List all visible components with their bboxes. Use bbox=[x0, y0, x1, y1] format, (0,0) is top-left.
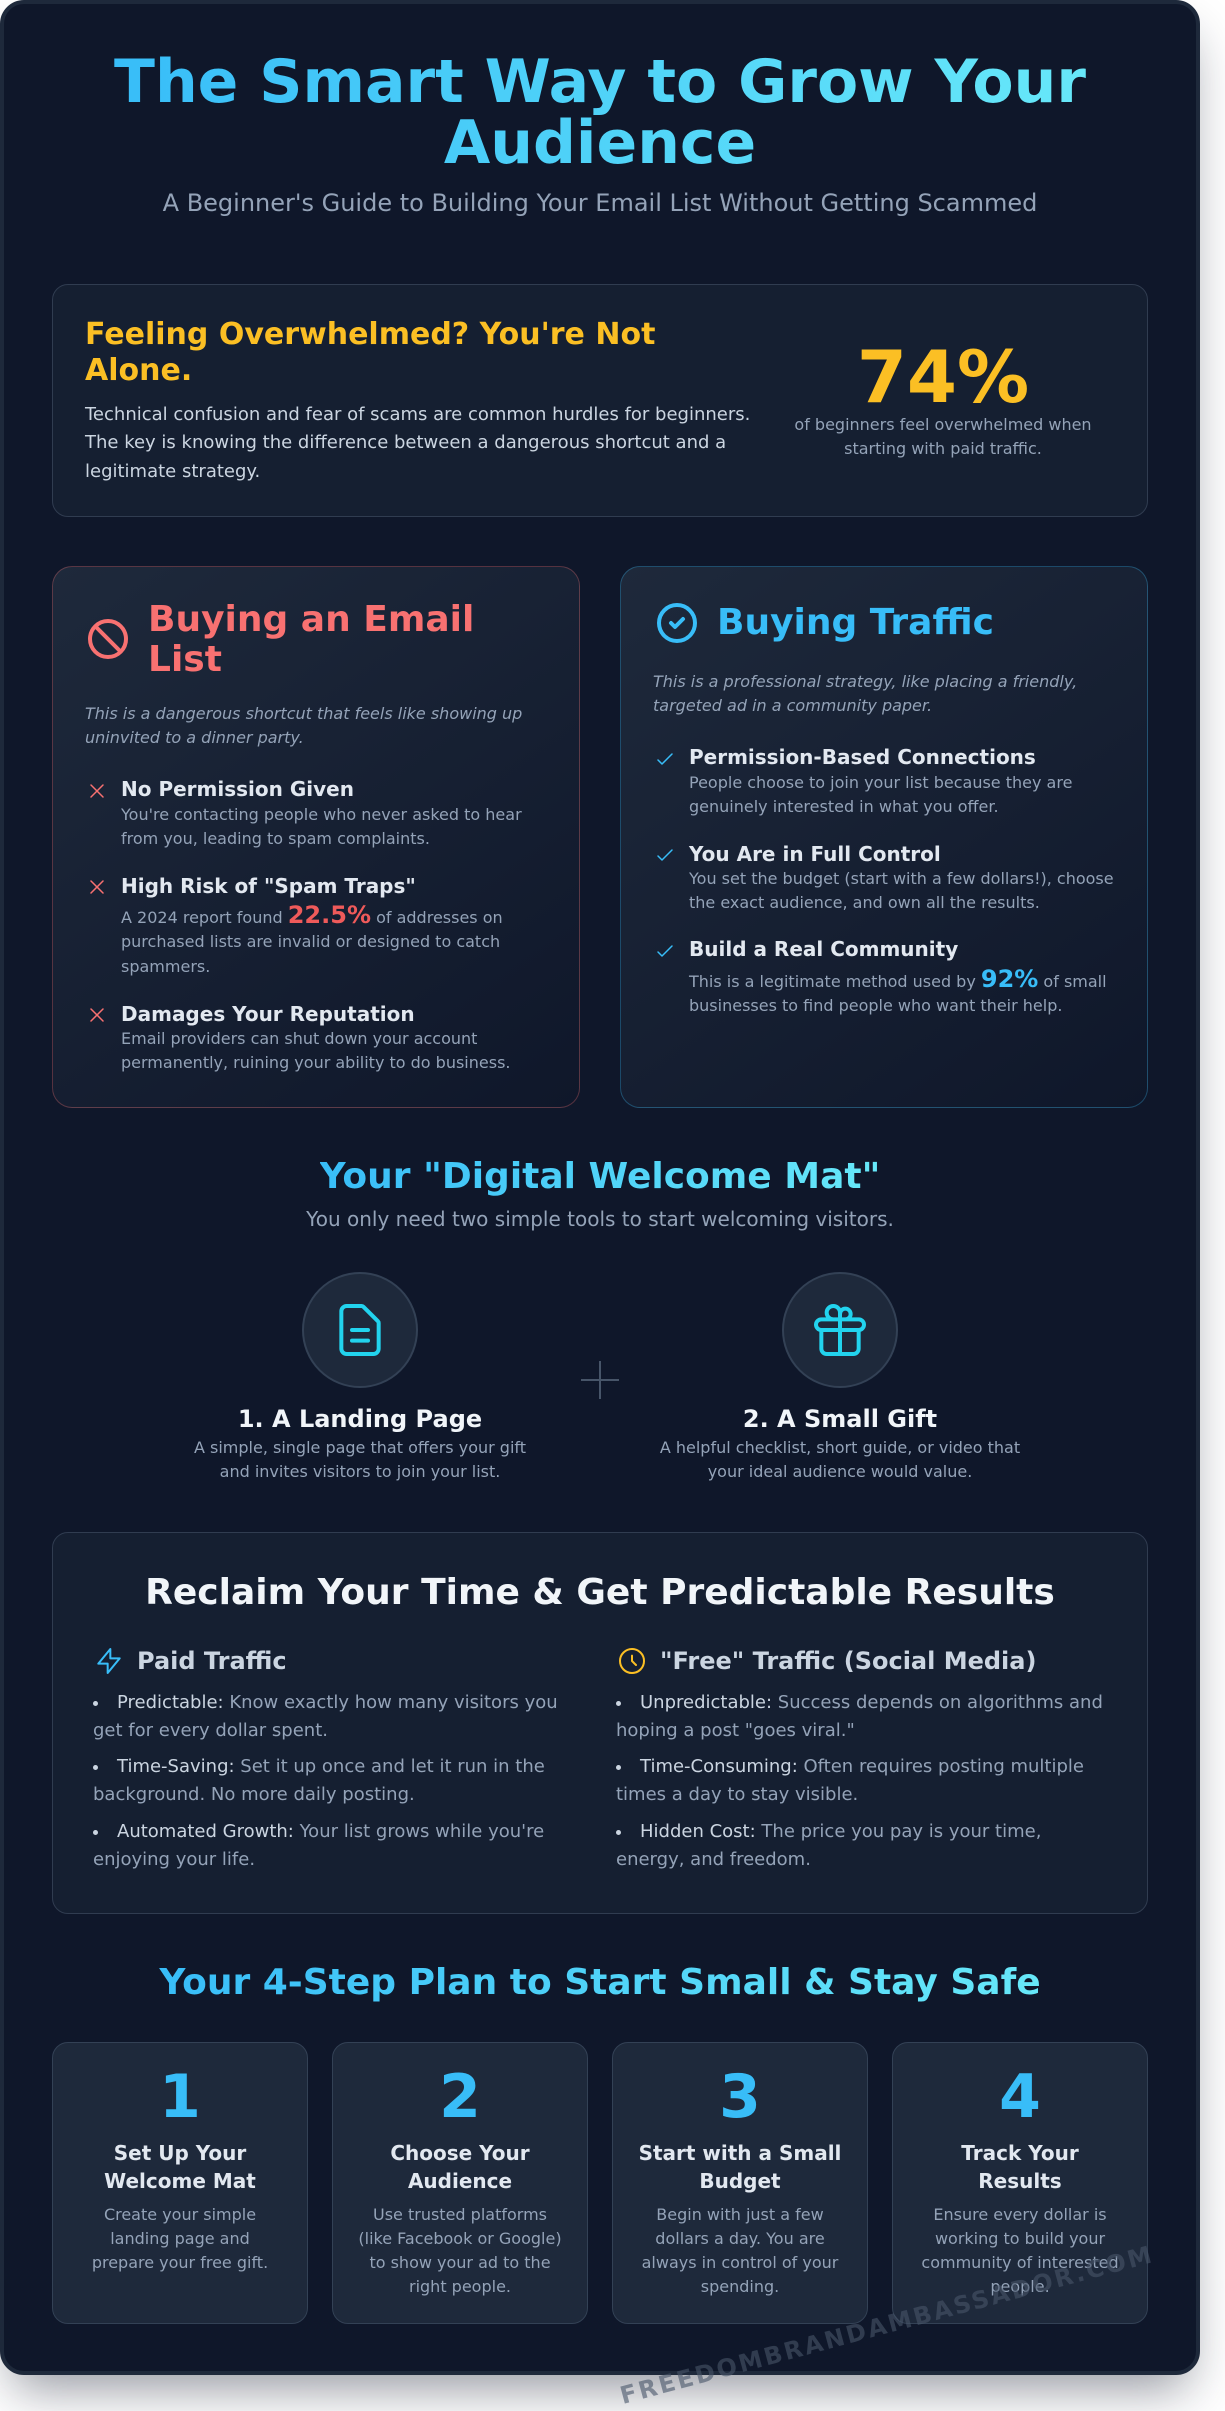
icon: document in circle bbox=[302, 1272, 418, 1388]
item text: People choose to join your list because they are bbox=[689, 772, 1072, 792]
section heading: digital welcome mat: Your "Digital Welcome Mat" bbox=[320, 1156, 880, 1197]
icon: check bbox=[657, 753, 673, 765]
stat caption: starting with paid traffic. bbox=[844, 439, 1042, 458]
step text: right people. bbox=[409, 2277, 511, 2296]
stat caption bbox=[794, 415, 1092, 458]
item text with stat: purchased lists are invalid or designed to catch bbox=[121, 932, 500, 951]
step text: spending. bbox=[701, 2277, 779, 2296]
step number: 3 bbox=[719, 2062, 761, 2132]
panel text bbox=[84, 404, 750, 482]
panel heading: Reclaim Your Time & Get Predictable Results bbox=[145, 1572, 1055, 1613]
item text: You set the budget (start with a few dollars!), choose bbox=[689, 868, 1114, 888]
step text: dollars a day. You are bbox=[655, 2229, 825, 2248]
step text: Begin with just a few bbox=[656, 2205, 824, 2224]
item text: Email providers can shut down your account bbox=[121, 1028, 477, 1048]
step text bbox=[92, 2205, 268, 2272]
step number: 2 bbox=[439, 2062, 481, 2132]
step number: 1 bbox=[159, 2062, 201, 2132]
step title bbox=[961, 2141, 1079, 2193]
step text bbox=[358, 2205, 562, 2296]
list: paid traffic: Predictable: Know exactly how many visitors you get for every dollar spent. bbox=[93, 1692, 558, 1741]
item text: You're contacting people who never asked to hear bbox=[121, 804, 522, 824]
icon: check circle bbox=[657, 603, 697, 643]
step title bbox=[639, 2141, 841, 2193]
tool description: and invites visitors to join your list. bbox=[220, 1462, 500, 1481]
step text: (like Facebook or Google) bbox=[358, 2229, 562, 2248]
icon: cross bbox=[90, 1008, 104, 1022]
item title: Permission-Based Connections bbox=[689, 745, 1036, 769]
card intro bbox=[653, 672, 1077, 715]
panel text: The key is knowing the difference between a dangerous shortcut and a bbox=[85, 432, 726, 453]
stat caption: of beginners feel overwhelmed when bbox=[794, 415, 1092, 434]
item title: You Are in Full Control bbox=[689, 842, 941, 866]
card heading: Buying an Email bbox=[148, 599, 474, 640]
item text: the exact audience, and own all the results. bbox=[689, 893, 1040, 912]
item text with stat bbox=[121, 901, 503, 976]
icon: gift in circle bbox=[782, 1272, 898, 1388]
panel: reclaim your time bbox=[52, 1532, 1148, 1914]
card heading bbox=[148, 599, 474, 680]
icon: lightning bbox=[97, 1648, 121, 1674]
step text: community of interested bbox=[921, 2253, 1119, 2272]
item text with stat: spammers. bbox=[121, 957, 210, 976]
step text: to show your ad to the bbox=[369, 2253, 551, 2272]
step text bbox=[921, 2205, 1119, 2296]
list: paid traffic: Time-Saving: Set it up once and let it run in the background. No more daily posting. bbox=[93, 1756, 545, 1805]
item text: genuinely interested in what you offer. bbox=[689, 797, 999, 816]
title: Audience bbox=[444, 108, 756, 178]
list: free traffic: Unpredictable: Success depends on algorithms and hoping a post "goes viral." bbox=[616, 1692, 1103, 1741]
step title: Track Your bbox=[961, 2141, 1079, 2165]
step text: prepare your free gift. bbox=[92, 2253, 268, 2272]
panel: feeling overwhelmed bbox=[52, 284, 1148, 517]
step text: landing page and bbox=[110, 2229, 250, 2248]
watermark: FREEDOMBRANDAMBASSADOR.COM bbox=[617, 2240, 1157, 2410]
tool description bbox=[194, 1438, 526, 1481]
icon: plus bbox=[581, 1361, 619, 1399]
panel: buying traffic bbox=[620, 566, 1148, 1108]
column heading: "Free" Traffic (Social Media) bbox=[660, 1647, 1036, 1675]
list: free traffic bbox=[616, 1692, 1103, 1870]
step title: Audience bbox=[408, 2169, 512, 2193]
card heading: Buying Traffic bbox=[717, 602, 994, 643]
tool description: A helpful checklist, short guide, or video that bbox=[660, 1438, 1020, 1457]
item text bbox=[121, 1028, 510, 1072]
list: paid traffic bbox=[93, 1692, 558, 1870]
stat: 74%: 74% bbox=[857, 335, 1029, 419]
panel heading bbox=[85, 317, 655, 388]
step text bbox=[642, 2205, 838, 2296]
step title: Welcome Mat bbox=[104, 2169, 256, 2193]
tool title: 1. A Landing Page bbox=[238, 1405, 482, 1433]
section heading: 4-step plan: Your 4-Step Plan to Start Small & Stay Safe bbox=[159, 1962, 1041, 2003]
step card 3 bbox=[612, 2042, 868, 2324]
card intro: This is a dangerous shortcut that feels like showing up bbox=[85, 704, 522, 723]
step title bbox=[104, 2141, 256, 2193]
item text: permanently, ruining your ability to do business. bbox=[121, 1053, 510, 1072]
list: free traffic: Time-Consuming: Often requires posting multiple times a day to stay visible. bbox=[616, 1756, 1084, 1805]
item text with stat bbox=[688, 965, 1107, 1015]
panel text: Technical confusion and fear of scams are common hurdles for beginners. bbox=[85, 404, 750, 425]
step title: Choose Your bbox=[390, 2141, 530, 2165]
tool description bbox=[660, 1438, 1020, 1481]
column heading: Paid Traffic bbox=[137, 1647, 287, 1675]
panel: buying an email list bbox=[52, 566, 580, 1108]
tool title: 2. A Small Gift bbox=[743, 1405, 937, 1433]
step text: Create your simple bbox=[104, 2205, 256, 2224]
title bbox=[114, 47, 1086, 178]
item text bbox=[689, 868, 1114, 912]
step text: always in control of your bbox=[642, 2253, 838, 2272]
panel heading: Alone. bbox=[85, 353, 192, 388]
card intro: targeted ad in a community paper. bbox=[653, 696, 932, 715]
step text: Use trusted platforms bbox=[373, 2205, 547, 2224]
card intro: uninvited to a dinner party. bbox=[85, 728, 304, 747]
step title: Results bbox=[978, 2169, 1062, 2193]
panel text: legitimate strategy. bbox=[85, 461, 260, 482]
step title: Budget bbox=[699, 2169, 781, 2193]
step card 2 bbox=[332, 2042, 588, 2324]
item title: Build a Real Community bbox=[689, 937, 958, 961]
step title bbox=[390, 2141, 530, 2193]
step number: 4 bbox=[999, 2062, 1041, 2132]
item text with stat: A 2024 report found 22.5% of addresses on bbox=[121, 901, 503, 929]
panel heading: Feeling Overwhelmed? You're Not bbox=[85, 317, 655, 352]
step text: working to build your bbox=[935, 2229, 1105, 2248]
tool description: your ideal audience would value. bbox=[708, 1462, 972, 1481]
title: The Smart Way to Grow Your bbox=[114, 47, 1086, 117]
step title: Set Up Your bbox=[114, 2141, 246, 2165]
step card 1 bbox=[52, 2042, 308, 2324]
step text: Ensure every dollar is bbox=[933, 2205, 1107, 2224]
item text bbox=[689, 772, 1072, 816]
item text: from you, leading to spam complaints. bbox=[121, 829, 430, 848]
icon: clock bbox=[619, 1648, 645, 1674]
tool description: A simple, single page that offers your gift bbox=[194, 1438, 526, 1457]
item title: No Permission Given bbox=[121, 777, 354, 801]
card heading: List bbox=[148, 639, 222, 680]
item title: Damages Your Reputation bbox=[121, 1002, 415, 1026]
card intro bbox=[85, 704, 522, 747]
icon: cross bbox=[90, 784, 104, 798]
item title: High Risk of "Spam Traps" bbox=[121, 874, 416, 898]
step text: people. bbox=[990, 2277, 1050, 2296]
section subheading: You only need two simple tools to start welcoming visitors. bbox=[306, 1207, 894, 1231]
icon: cross bbox=[90, 880, 104, 894]
subtitle: A Beginner's Guide to Building Your Email List Without Getting Scammed bbox=[163, 189, 1037, 217]
list: paid traffic: Automated Growth: Your list grows while you're enjoying your life. bbox=[93, 1821, 544, 1870]
icon: check bbox=[657, 945, 673, 957]
list: free traffic: Hidden Cost: The price you pay is your time, energy, and freedom. bbox=[616, 1821, 1041, 1870]
item text with stat: businesses to find people who want their help. bbox=[689, 996, 1062, 1015]
icon: ban bbox=[88, 619, 128, 659]
card intro: This is a professional strategy, like placing a friendly, bbox=[653, 672, 1077, 691]
icon: check bbox=[657, 849, 673, 861]
item text bbox=[121, 804, 522, 848]
step card 4 bbox=[892, 2042, 1148, 2324]
step title: Start with a Small bbox=[639, 2141, 841, 2165]
item text with stat: This is a legitimate method used by 92% of small bbox=[689, 965, 1107, 993]
